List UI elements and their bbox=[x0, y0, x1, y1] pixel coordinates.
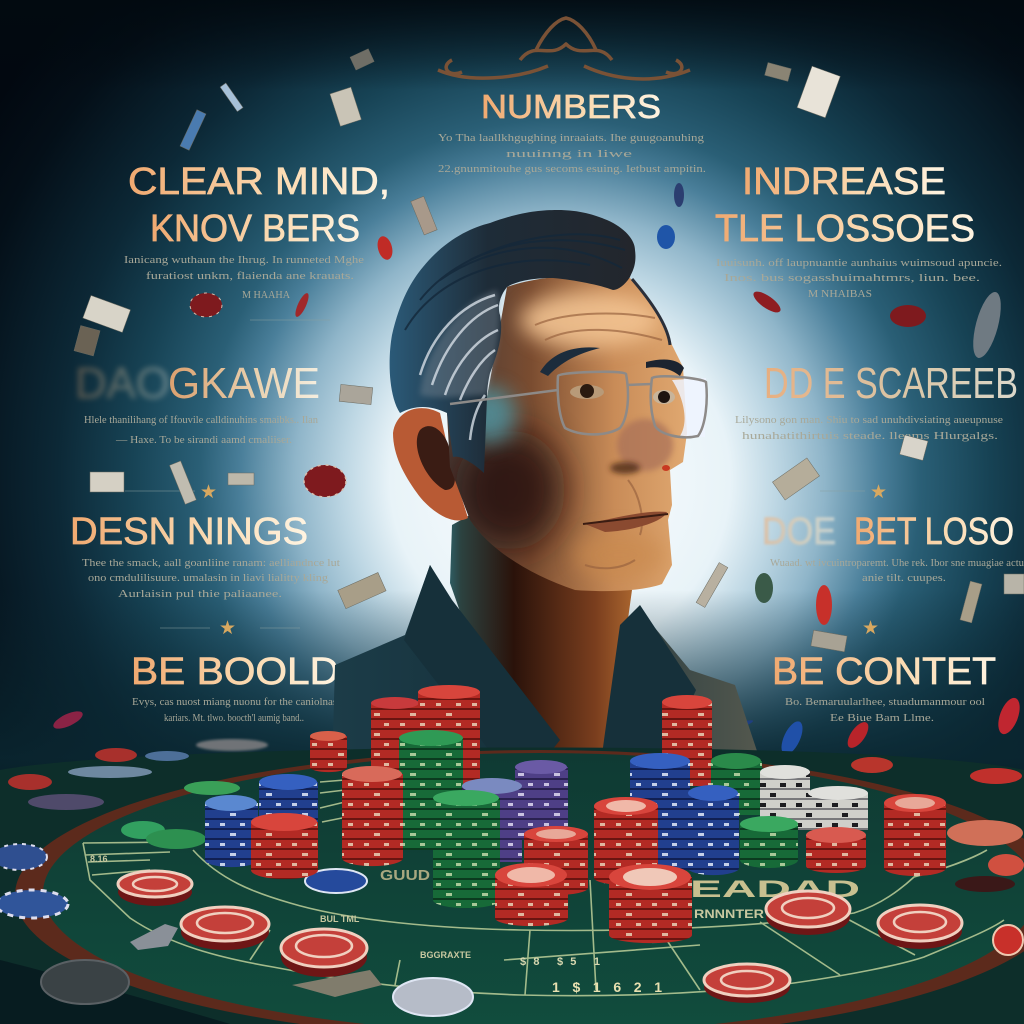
stacks back row bbox=[205, 685, 868, 870]
panel: indrease: Iuuisunh. off laupnuantie aunhaius wuimsoud apuncie. bbox=[716, 258, 1002, 269]
back hair line bbox=[632, 279, 670, 345]
panel: be boold: BE BOOLD bbox=[131, 651, 339, 693]
ornament bbox=[438, 18, 690, 79]
panel: clear mind bbox=[124, 161, 390, 301]
panel: bet loso: anie tilt. cuupes. bbox=[862, 573, 946, 584]
panel: be contet: Ee Biue Bam Llme. bbox=[830, 713, 934, 724]
floating cards bbox=[74, 49, 1024, 652]
lower shade bbox=[0, 590, 1024, 830]
man bbox=[334, 210, 757, 750]
table text bbox=[90, 854, 860, 995]
table text: 1 $ 1 6 2 1 bbox=[552, 979, 662, 995]
panel: bet loso bbox=[762, 511, 1024, 584]
panel: bet loso: Wuaad. wt ivcuintroparemt. Uhe rek. Ibor sne muagiae actu bbox=[770, 558, 1024, 569]
table text: BUL TML bbox=[320, 914, 360, 924]
panel: be contet bbox=[772, 651, 996, 724]
table text: $8 $5 1 bbox=[520, 956, 600, 968]
gray patch bbox=[420, 290, 500, 397]
floating chips bbox=[51, 183, 1024, 758]
panel: desn nings: Thee the smack, aall goanliine ranam: aelliandnce lut bbox=[82, 558, 340, 569]
stars: ★ bbox=[219, 618, 236, 639]
panel: be boold: Evys, cas nuost miang nuonu for the caniolnas. bbox=[132, 697, 340, 708]
panel: blurred left bbox=[75, 359, 320, 446]
panel: indrease: Inos. bus sogasshuimahtmrs, liun. bee. bbox=[724, 273, 980, 284]
shirt bbox=[330, 565, 760, 840]
text: numbers body bbox=[438, 133, 706, 175]
panel: indrease bbox=[715, 161, 1002, 300]
face bbox=[447, 275, 687, 591]
stars: ★ bbox=[870, 482, 887, 503]
panel: desn nings bbox=[70, 511, 340, 600]
eyes bbox=[570, 385, 604, 399]
table text: EADAD bbox=[690, 876, 860, 903]
hair bbox=[390, 210, 635, 473]
panel: bet loso: DOE bbox=[762, 511, 836, 553]
panel: clear mind: furatiost unkm, flaienda ane krauats. bbox=[146, 271, 354, 282]
hair strands bbox=[405, 234, 625, 330]
panel: be contet: Bo. Bemaruularlhee, stuadumanmour ool bbox=[785, 697, 985, 708]
felt lines bbox=[83, 780, 1004, 996]
flat red chips bbox=[118, 871, 962, 996]
panel: desn nings: ono cmdulilisuure. umalasin in liavi lialitty kling bbox=[88, 573, 329, 584]
panel: blurred right bbox=[735, 359, 1018, 442]
chip inner rings bbox=[133, 877, 946, 989]
table text: RNNNTER bbox=[694, 907, 764, 921]
table felt bbox=[43, 753, 1024, 1024]
panel: be boold bbox=[131, 651, 340, 724]
panel: blurred left: DAO bbox=[75, 359, 170, 408]
mouth bbox=[585, 512, 667, 532]
table bbox=[0, 685, 1024, 1024]
outer table bbox=[0, 747, 1024, 1024]
table text: 8.16 bbox=[90, 854, 108, 864]
panel: blurred left: Hlele thanilihang of Ifouvile calldinuhins smaibks.. Ilan bbox=[84, 415, 319, 426]
panel: desn nings: Aurlaisin pul thie paliaanee. bbox=[118, 589, 282, 600]
neck bbox=[450, 515, 632, 830]
stars bbox=[200, 482, 887, 639]
wrinkles bbox=[535, 314, 662, 568]
gray hair bbox=[420, 295, 498, 440]
face shading bbox=[455, 292, 673, 579]
money and cards on felt bbox=[130, 924, 178, 950]
text: numbers body: 22.gnunmitouhe gus secoms esuing. Ietbust ampitin. bbox=[438, 164, 706, 175]
panel: clear mind: M HAAHA bbox=[242, 290, 290, 301]
panel: blurred right: hunahatithirtuis steade. lleams Hlurgalgs. bbox=[742, 431, 998, 442]
collars bbox=[404, 565, 696, 830]
table text: GUUD bbox=[380, 867, 430, 884]
bottom left shade bbox=[0, 960, 230, 1024]
panel: clear mind: KNOV BERS bbox=[150, 208, 360, 250]
panel: desn nings: DESN NINGS bbox=[70, 511, 308, 553]
panel: blurred left: — Haxe. To be sirandi aamd cmaliiser. bbox=[115, 435, 292, 446]
ear bbox=[393, 408, 468, 520]
heading: numbers: NUMBERS bbox=[481, 88, 661, 125]
stacks front row bbox=[251, 766, 946, 943]
eyebrows bbox=[540, 347, 600, 376]
panel: blurred right: Lilysono gon man. Shiu to sad unuhdivsiating aueupnuse bbox=[735, 415, 1003, 426]
panel: clear mind: CLEAR MIND, bbox=[128, 161, 390, 203]
table back chips bbox=[0, 739, 1024, 1004]
glasses bbox=[450, 372, 707, 437]
panel: clear mind: Ianicang wuthaun the Ihrug. In runneted Mghe bbox=[124, 255, 364, 266]
panel: be boold: kariars. Mt. tlwo. boocth'l aumig band.. bbox=[164, 713, 304, 724]
flat chip sides bbox=[118, 878, 962, 1003]
panel: indrease: M NHAIBAS bbox=[808, 289, 872, 300]
text: numbers body: nuuinng in liwe bbox=[506, 149, 633, 160]
table rail bbox=[15, 750, 1024, 1024]
panel: be contet: BE CONTET bbox=[772, 651, 996, 693]
stars: ★ bbox=[200, 482, 217, 503]
stars: ★ bbox=[862, 618, 879, 639]
flat blue chips bbox=[305, 869, 473, 1016]
panel: blurred left: GKAWE bbox=[168, 359, 320, 408]
panel: indrease: INDREASE bbox=[742, 161, 946, 203]
panel: indrease: TLE LOSSOES bbox=[715, 208, 975, 250]
text: numbers body: Yo Tha laallkhgughing inraaiats. Ihe guugoanuhing bbox=[438, 133, 705, 144]
table text: BGGRAXTE bbox=[420, 950, 471, 960]
top shade bbox=[0, 0, 1024, 90]
